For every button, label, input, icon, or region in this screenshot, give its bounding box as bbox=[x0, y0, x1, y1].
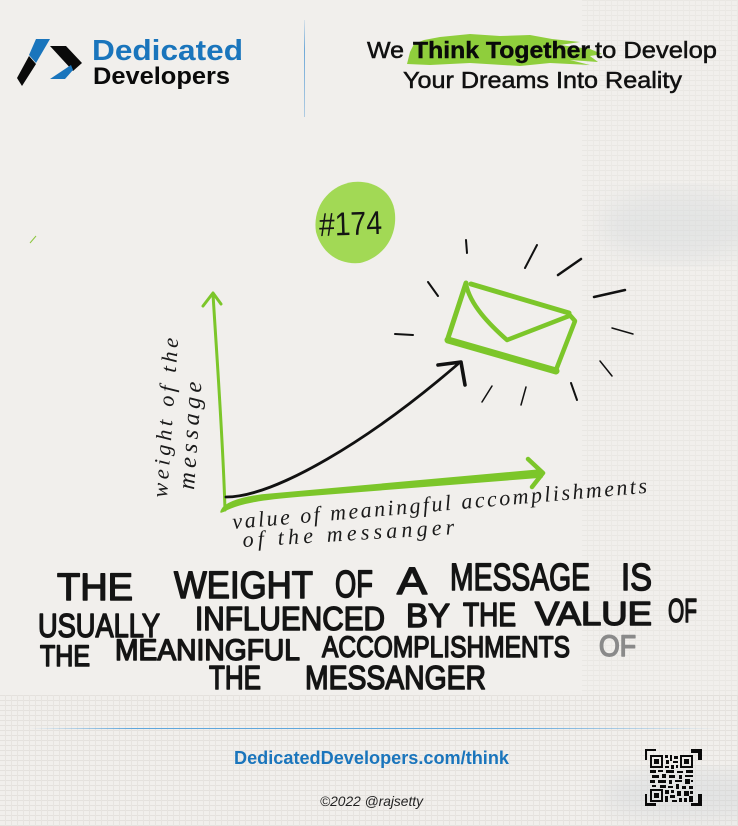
statement line 1 bbox=[57, 557, 652, 609]
statement line 1: MESSAGE bbox=[450, 557, 590, 599]
statement line 3: OF bbox=[599, 630, 636, 663]
statement line 3 bbox=[40, 630, 636, 673]
statement line 2: VALUE bbox=[535, 595, 652, 632]
footer divider bbox=[30, 728, 720, 729]
statement line 2: THE bbox=[463, 596, 516, 633]
statement line 2: OF bbox=[668, 592, 697, 629]
chart: weight vs value bbox=[147, 240, 648, 552]
main statement bbox=[38, 557, 697, 696]
statement line 2 bbox=[38, 592, 697, 644]
envelope icon bbox=[448, 283, 575, 371]
statement line 2: BY bbox=[406, 597, 450, 634]
QR code bbox=[645, 749, 702, 806]
y axis label line 1: weight of the bbox=[147, 337, 183, 498]
header divider bbox=[304, 20, 305, 117]
envelope sparkle rays bbox=[395, 240, 633, 405]
statement line 2: USUALLY bbox=[38, 607, 160, 644]
tagline line 1 start: We bbox=[367, 37, 404, 63]
y axis arrow bbox=[203, 293, 225, 510]
x axis label line 2: of the messanger bbox=[242, 514, 455, 552]
x axis label line 1: value of meaningful accomplishments bbox=[231, 473, 648, 534]
statement line 1: WEIGHT bbox=[174, 565, 313, 607]
logo wordmark top: Dedicated bbox=[92, 35, 243, 67]
tagline bbox=[367, 34, 717, 93]
badge: #174 bbox=[315, 182, 395, 263]
tagline emphasis: Think Together bbox=[413, 37, 590, 63]
x axis arrow bbox=[221, 459, 543, 512]
badge: #174: #174 bbox=[318, 204, 383, 243]
logo mark bbox=[17, 39, 82, 86]
statement line 2: INFLUENCED bbox=[195, 600, 385, 637]
statement line 1: OF bbox=[335, 564, 373, 606]
statement line 1: IS bbox=[621, 557, 652, 599]
statement line 3: ACCOMPLISHMENTS bbox=[322, 631, 570, 664]
tagline line 2: Your Dreams Into Reality bbox=[403, 67, 683, 93]
y axis label line 2: message bbox=[174, 381, 208, 490]
statement line 1: A bbox=[397, 561, 428, 603]
statement line 3: MEANINGFUL bbox=[115, 634, 300, 667]
footer link: DedicatedDevelopers.com/think bbox=[234, 748, 510, 768]
statement line 4 bbox=[209, 659, 486, 696]
statement line 3: THE bbox=[40, 640, 90, 673]
green brush highlight bbox=[407, 34, 602, 66]
statement line 4: MESSANGER bbox=[305, 659, 486, 696]
logo wordmark bottom: Developers bbox=[93, 63, 230, 90]
statement line 4: THE bbox=[209, 659, 261, 696]
growth curve arrow bbox=[226, 362, 465, 497]
statement line 1: THE bbox=[57, 567, 133, 609]
logo: Dedicated Developers bbox=[17, 35, 243, 90]
tagline line 1 end: to Develop bbox=[595, 37, 717, 63]
copyright: ©2022 @rajsetty bbox=[320, 793, 424, 809]
